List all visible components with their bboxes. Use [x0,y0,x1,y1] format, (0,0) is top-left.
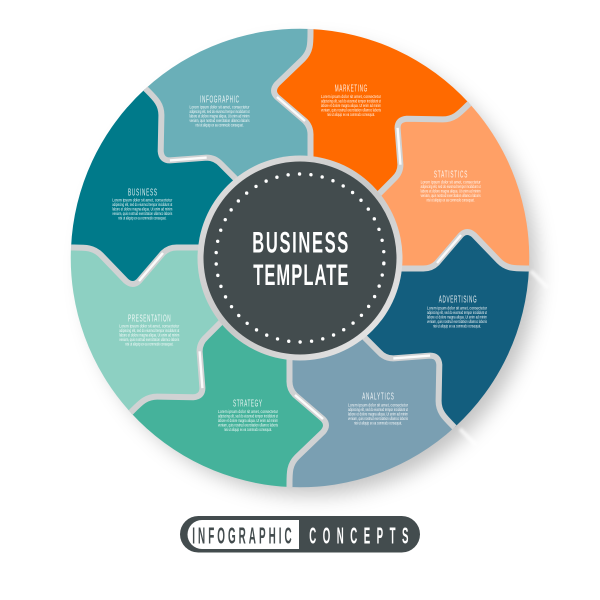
panel: marketing: adipiscing elit, sed do eiusmod tempor incididunt ut [321,98,381,104]
panel: presentation: nisi ut aliquip ex ea commodo consequat. [125,342,173,347]
panel: infographic: adipiscing elit, sed do eiusmod tempor incididunt ut [190,109,250,114]
panel: infographic: veniam, quis nostrud exercitation ullamco laboris [190,118,250,123]
panel: advertising: ADVERTISING [439,294,477,305]
panel: analytics [225,284,481,539]
panel: presentation: veniam, quis nostrud exercitation ullamco laboris [119,337,180,342]
panel: strategy: adipiscing elit, sed do eiusmod tempor incididunt ut [218,414,278,418]
panel: strategy: Lorem ipsum dolor sit amet, consectetur [218,409,278,414]
panel: strategy: labore et dolore magna aliqua. Ut enim ad minim [218,418,278,423]
dotted ring [210,168,390,348]
panel: business: veniam, quis nostrud exercitation ullamco laboris [112,211,173,216]
panel: presentation [19,183,274,439]
panel: marketing: labore et dolore magna aliqua. Ut enim ad minim [321,103,381,108]
panel: statistics: labore et dolore magna aliqua. Ut enim ad minim [421,189,481,194]
panel: business: labore et dolore magna aliqua. Ut enim ad minim [112,207,173,212]
panel: business: Lorem ipsum dolor sit amet, consectetur [112,198,173,203]
panel: marketing: MARKETING [335,83,367,94]
panel: strategy: veniam, quis nostrud exercitation ullamco laboris [218,422,279,428]
panel: analytics: nisi ut aliquip ex ea commodo consequat. [354,420,402,425]
panel: marketing [272,29,469,194]
panel: advertising: veniam, quis nostrud exercitation ullamco laboris [427,319,488,324]
bottom pill: infographic concepts: INFOGRAPHIC [192,523,292,548]
panel: business: adipiscing elit, sed do eiusmod tempor incididunt ut [112,202,173,207]
panel: statistics: Lorem ipsum dolor sit amet, consectetur [421,180,481,185]
center title [252,227,348,292]
panel: strategy [131,322,328,487]
panel: advertising: Lorem ipsum dolor sit amet, consectetur [427,306,487,311]
wheel shadow [85,43,537,495]
panel: advertising [364,230,529,427]
panel: analytics: adipiscing elit, sed do eiusmod tempor incididunt ut [348,407,408,412]
panel: statistics: STATISTICS [434,168,467,180]
bottom pill: infographic concepts: CONCEPTS [309,522,409,549]
panel: marketing: nisi ut aliquip ex ea commodo consequat. [327,112,375,117]
panel: presentation: PRESENTATION [128,312,171,324]
panel: analytics: labore et dolore magna aliqua. Ut enim ad minim [348,411,408,416]
panel: statistics: veniam, quis nostrud exercitation ullamco laboris [421,193,481,198]
panel: strategy: STRATEGY [233,398,262,409]
panel: statistics [326,77,581,333]
panel: infographic: nisi ut aliquip ex ea commodo consequat. [196,123,244,128]
panel: advertising: adipiscing elit, sed do eiusmod tempor incididunt ut [427,310,487,315]
panel: infographic [119,0,375,232]
panel: presentation: Lorem ipsum dolor sit amet, consectetur [119,324,180,329]
panel: infographic: labore et dolore magna aliqua. Ut enim ad minim [190,114,250,119]
piece separators [71,29,548,487]
panel: business: nisi ut aliquip ex ea commodo consequat. [118,216,166,221]
panel: presentation: adipiscing elit, sed do eiusmod tempor incididunt ut [119,328,180,333]
center title: BUSINESS [252,227,348,260]
panel: presentation: labore et dolore magna aliqua. Ut enim ad minim [119,333,180,338]
panel: marketing: Lorem ipsum dolor sit amet, consectetur [321,94,381,99]
panel: business: BUSINESS [128,186,157,198]
panel: analytics: ANALYTICS [362,391,394,402]
center badge [198,156,402,360]
panel: strategy: nisi ut aliquip ex ea commodo consequat. [224,427,272,432]
panel: infographic: Lorem ipsum dolor sit amet, consectetur [190,105,250,110]
panel: statistics: adipiscing elit, sed do eiusmod tempor incididunt ut [421,184,481,189]
panel: analytics: veniam, quis nostrud exercitation ullamco laboris [348,416,409,421]
panel: advertising: nisi ut aliquip ex ea commodo consequat. [433,324,481,329]
panel: marketing: veniam, quis nostrud exercitation ullamco laboris [321,108,382,112]
panel: infographic: INFOGRAPHIC [200,94,239,105]
panel: advertising: labore et dolore magna aliqua. Ut enim ad minim [427,315,487,320]
center title: TEMPLATE [253,259,348,292]
panel: analytics: Lorem ipsum dolor sit amet, consectetur [348,402,408,407]
panel: statistics: nisi ut aliquip ex ea commodo consequat. [427,198,475,203]
panel: business [71,89,236,286]
bottom pill: infographic concepts [180,516,420,552]
